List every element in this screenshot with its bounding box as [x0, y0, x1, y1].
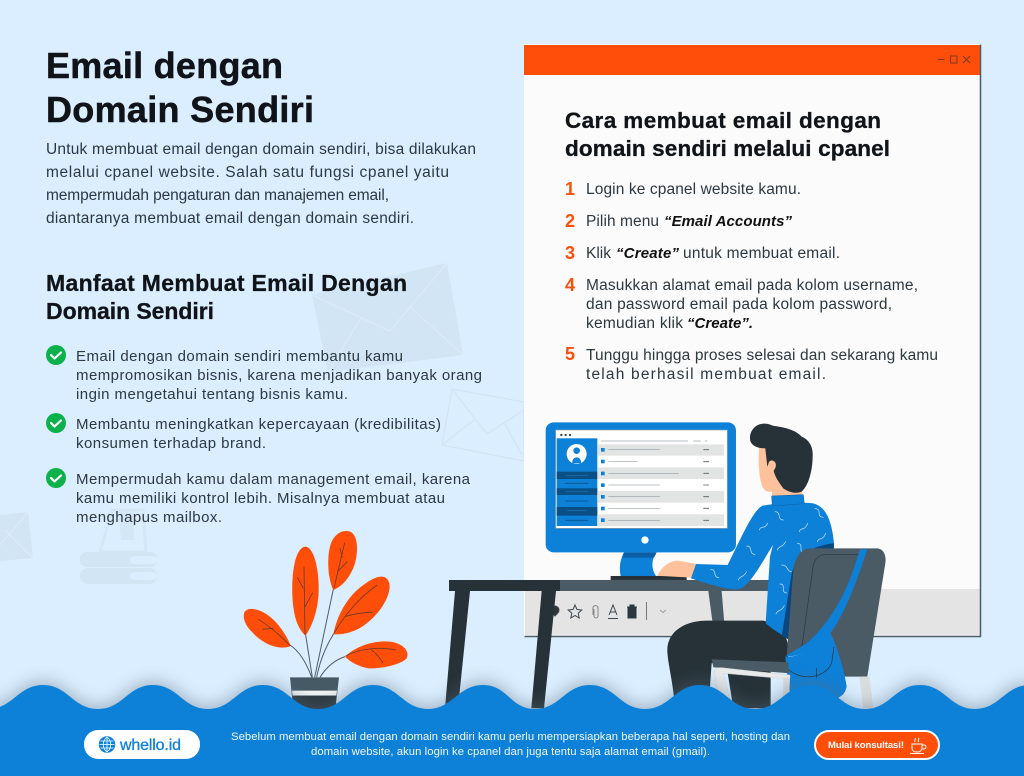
- steps list: [565, 179, 938, 383]
- step 4: “Create”.: [687, 315, 753, 332]
- plant illustration: [244, 531, 407, 710]
- step 3: Klik: [586, 245, 611, 262]
- heading: manfaat: Domain Sendiri: [46, 298, 214, 324]
- title: Domain Sendiri: [46, 89, 314, 130]
- footer note: domain website, akun login ke cpanel dan juga tentu saja alamat email (gmail).: [311, 746, 710, 758]
- intro paragraph: Untuk membuat email dengan domain sendiri, bisa dilakukan: [46, 141, 476, 158]
- step 1: Login ke cpanel website kamu.: [586, 181, 801, 198]
- intro paragraph: diantaranya membuat email dengan domain sendiri.: [46, 210, 414, 227]
- step 3: [565, 243, 840, 263]
- logo pill: whello.id: whello.id: [119, 737, 181, 754]
- title: [46, 45, 314, 130]
- step 2: Pilih menu: [586, 213, 659, 230]
- steps heading: Cara membuat email dengan: [565, 108, 881, 133]
- step 5: telah berhasil membuat email.: [586, 366, 826, 383]
- benefits list: [46, 345, 482, 526]
- icon: globe: [100, 737, 114, 752]
- window footer toolbar: [525, 589, 980, 635]
- step 4: dan password email pada kolom password,: [586, 296, 892, 313]
- step 2: [565, 211, 792, 231]
- step 2: “Email Accounts”: [664, 213, 792, 230]
- benefit 1: Email dengan domain sendiri membantu kamu: [76, 348, 403, 365]
- intro paragraph: [46, 141, 476, 227]
- benefit 1: ingin mengetahui tentang bisnis kamu.: [76, 386, 348, 403]
- benefit 2: Membantu meningkatkan kepercayaan (kredibilitas): [76, 416, 441, 433]
- intro paragraph: melalui cpanel website. Salah satu fungsi cpanel yaitu: [46, 164, 449, 181]
- monitor stand: [620, 552, 657, 576]
- step 3: “Create”: [616, 245, 680, 262]
- benefit 3: kamu memiliki kontrol lebih. Misalnya membuat atau: [76, 490, 445, 507]
- monitor: [546, 422, 736, 552]
- step 2: 2: [565, 211, 575, 231]
- button: mulai konsultasi: Mulai konsultasi!: [828, 740, 904, 751]
- heading: manfaat: Manfaat Membuat Email Dengan: [46, 270, 407, 296]
- step 1: 1: [565, 179, 575, 199]
- step 5: 5: [565, 344, 575, 364]
- hair: [750, 424, 813, 493]
- desk: [445, 580, 780, 708]
- logo pill: whello.id: [84, 730, 200, 759]
- shirt: [691, 495, 834, 639]
- title: Email dengan: [46, 45, 283, 86]
- footer wave band: [0, 681, 1024, 776]
- benefit 2: [46, 413, 441, 452]
- toolbar icons: [551, 602, 666, 620]
- benefit 1: mempromosikan bisnis, karena menjadikan banyak orang: [76, 367, 482, 384]
- chair: [712, 548, 886, 708]
- benefit 1: [46, 345, 482, 403]
- step 3: untuk membuat email.: [683, 245, 840, 262]
- heading: manfaat: [46, 270, 407, 324]
- window controls: [938, 56, 970, 63]
- step 4: [565, 275, 918, 332]
- background decoration: envelopes and books: [0, 263, 524, 584]
- footer note: Sebelum membuat email dengan domain sendiri kamu perlu mempersiapkan beberapa hal seperti, hosting dan: [231, 731, 790, 743]
- benefit 3: menghapus mailbox.: [76, 509, 222, 526]
- head: [759, 445, 803, 497]
- footer note: [231, 731, 790, 758]
- benefit 3: Mempermudah kamu dalam management email, karena: [76, 471, 471, 488]
- steps heading: domain sendiri melalui cpanel: [565, 136, 890, 161]
- step 4: kemudian klik: [586, 315, 683, 332]
- illustration: person working at desk with monitor: [445, 422, 886, 708]
- benefit 3: [46, 468, 471, 526]
- step 3: 3: [565, 243, 575, 263]
- step 5: [565, 344, 938, 383]
- keyboard: [611, 576, 687, 580]
- browser window panel: [524, 44, 981, 637]
- step 4: 4: [565, 275, 575, 295]
- benefit 2: konsumen terhadap brand.: [76, 435, 266, 452]
- steps heading: [565, 108, 890, 161]
- icon: coffee cup: [910, 738, 926, 754]
- pants: [667, 621, 788, 708]
- step 5: Tunggu hingga proses selesai dan sekarang kamu: [586, 347, 938, 364]
- hand: [657, 561, 697, 578]
- window title bar: [524, 45, 981, 75]
- step 4: Masukkan alamat email pada kolom username,: [586, 277, 918, 294]
- intro paragraph: mempermudah pengaturan dan manajemen email,: [46, 187, 389, 204]
- button: mulai konsultasi: [815, 731, 939, 759]
